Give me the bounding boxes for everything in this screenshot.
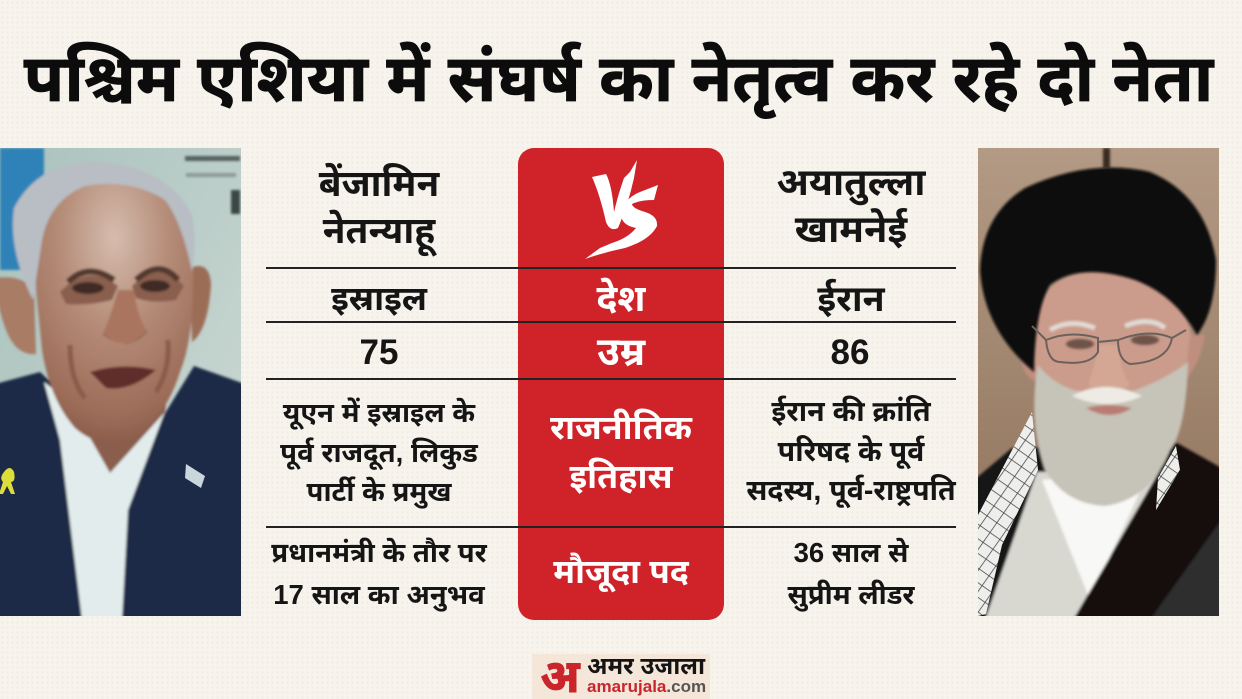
logo url: amarujala.com	[587, 677, 706, 696]
row: country	[331, 278, 886, 319]
label: current post: मौजूदा पद	[553, 554, 689, 591]
right leader name: अयातुल्ला	[776, 162, 925, 204]
history Khamenei: परिषद के पूर्व	[778, 436, 924, 468]
label: political history	[550, 408, 692, 496]
Iran: ईरान	[817, 278, 885, 319]
history Khamenei: सदस्य, पूर्व-राष्ट्रपति	[746, 475, 956, 507]
history Netanyahu: यूएन में इस्राइल के	[283, 397, 475, 428]
ribbon pin	[0, 468, 15, 494]
history Netanyahu	[280, 397, 478, 509]
post Khamenei: 36 साल से	[794, 537, 908, 568]
label: political history: राजनीतिक	[550, 409, 692, 447]
left leader name: नेतन्याहू	[323, 210, 435, 251]
Israel: इस्राइल	[331, 280, 427, 318]
post Netanyahu	[271, 537, 488, 612]
label: political history: इतिहास	[569, 458, 673, 496]
title: पश्चिम एशिया में संघर्ष का नेतृत्व कर रहे दो नेता	[24, 41, 1213, 115]
label: age: उम्र	[597, 331, 645, 374]
label: country: देश	[597, 278, 645, 319]
logo wordmark: अमर उजाला	[587, 653, 705, 680]
photo: Benjamin Netanyahu	[0, 148, 241, 616]
post Khamenei: सुप्रीम लीडर	[787, 579, 915, 610]
left leader name	[318, 162, 440, 257]
post Netanyahu: 17 साल का अनुभव	[273, 579, 485, 610]
age Netanyahu: 75	[360, 333, 398, 372]
logo: Amar Ujala	[532, 654, 710, 699]
panel: red centre column	[518, 148, 724, 620]
history Khamenei	[746, 395, 956, 508]
right leader name: खामनेई	[795, 209, 907, 251]
history Khamenei: ईरान की क्रांति	[771, 396, 931, 428]
divider lines	[266, 267, 956, 268]
glasses	[1032, 326, 1186, 364]
left leader name: बेंजामिन	[319, 163, 439, 204]
history Netanyahu: पूर्व राजदूत, लिकुड	[280, 436, 478, 468]
photo: Ayatollah Khamenei	[978, 148, 1219, 616]
row: current post	[271, 537, 915, 612]
post Khamenei	[787, 537, 915, 612]
icon: VS logo	[585, 160, 658, 259]
post Netanyahu: प्रधानमंत्री के तौर पर	[271, 537, 487, 568]
age Khamenei: 86	[831, 333, 869, 372]
row: age	[360, 331, 869, 374]
row: political history	[280, 395, 956, 509]
shawl	[978, 412, 1038, 616]
right leader name	[776, 162, 926, 251]
history Netanyahu: पार्टी के प्रमुख	[307, 476, 451, 507]
